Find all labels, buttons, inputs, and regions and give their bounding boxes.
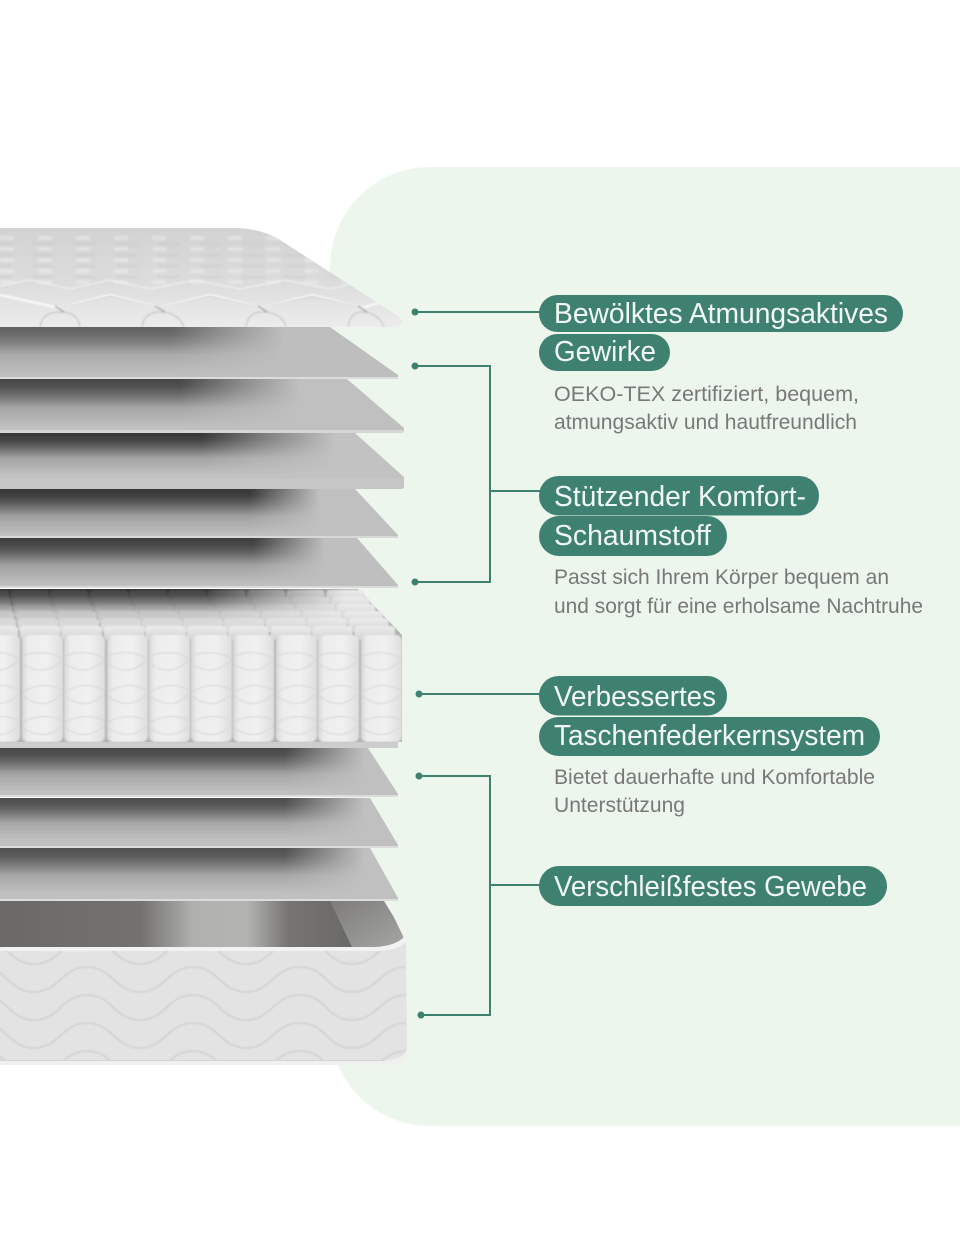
layer: pocket spring core	[0, 589, 402, 748]
heading: Verschleißfestes Gewebe: Verschleißfestes Gewebe	[554, 871, 867, 903]
layer: quilted top cover	[0, 228, 404, 327]
heading: Verbessertes Taschenfederkernsystem: Taschenfederkernsystem	[554, 720, 865, 752]
text: foam description	[554, 566, 923, 618]
text: foam description: Passt sich Ihrem Körper bequem an	[554, 566, 889, 589]
mattress: exploded layers	[0, 228, 407, 1076]
text: cover description: OEKO-TEX zertifiziert, bequem,	[554, 383, 859, 406]
panel: green background	[330, 167, 960, 1126]
layer: comfort foam sheet 4	[0, 489, 398, 538]
heading: Bewölktes Atmungsaktives Gewirke: Gewirke	[554, 336, 656, 368]
heading: Bewölktes Atmungsaktives Gewirke	[539, 295, 903, 371]
heading: Stützender Komfort-Schaumstoff: Stützender Komfort-	[554, 481, 806, 513]
layer: lower foam sheet 1	[0, 748, 398, 797]
text: cover description: atmungsaktiv und hautfreundlich	[554, 411, 857, 434]
connector: top cover to heading	[412, 308, 540, 316]
layer: lower foam sheet 3	[0, 848, 398, 901]
text: spring description: Unterstützung	[554, 794, 685, 817]
connector: fabric bracket	[416, 772, 540, 1018]
heading: Stützender Komfort-Schaumstoff: Schaumstoff	[554, 520, 712, 552]
layer: wear-resistant fabric base	[0, 901, 407, 1076]
layer: comfort foam sheet 1	[0, 327, 398, 379]
layer: comfort foam sheet 3	[0, 433, 404, 489]
heading: Verbessertes Taschenfederkernsystem	[539, 676, 880, 756]
layer: comfort foam sheet 5	[0, 538, 398, 588]
text: foam description: und sorgt für eine erholsame Nachtruhe	[554, 595, 923, 618]
text: cover description	[554, 383, 859, 434]
heading: Stützender Komfort-Schaumstoff	[539, 476, 819, 556]
layer: lower foam sheet 2	[0, 798, 398, 848]
heading: Verbessertes Taschenfederkernsystem: Verbessertes	[554, 681, 716, 713]
connector: spring core to heading	[416, 690, 540, 698]
connector: foam bracket	[412, 362, 540, 586]
heading: Bewölktes Atmungsaktives Gewirke: Bewölktes Atmungsaktives	[554, 298, 888, 330]
layer: comfort foam sheet 2	[0, 379, 404, 433]
text: spring description	[554, 766, 875, 817]
text: spring description: Bietet dauerhafte und Komfortable	[554, 766, 875, 789]
